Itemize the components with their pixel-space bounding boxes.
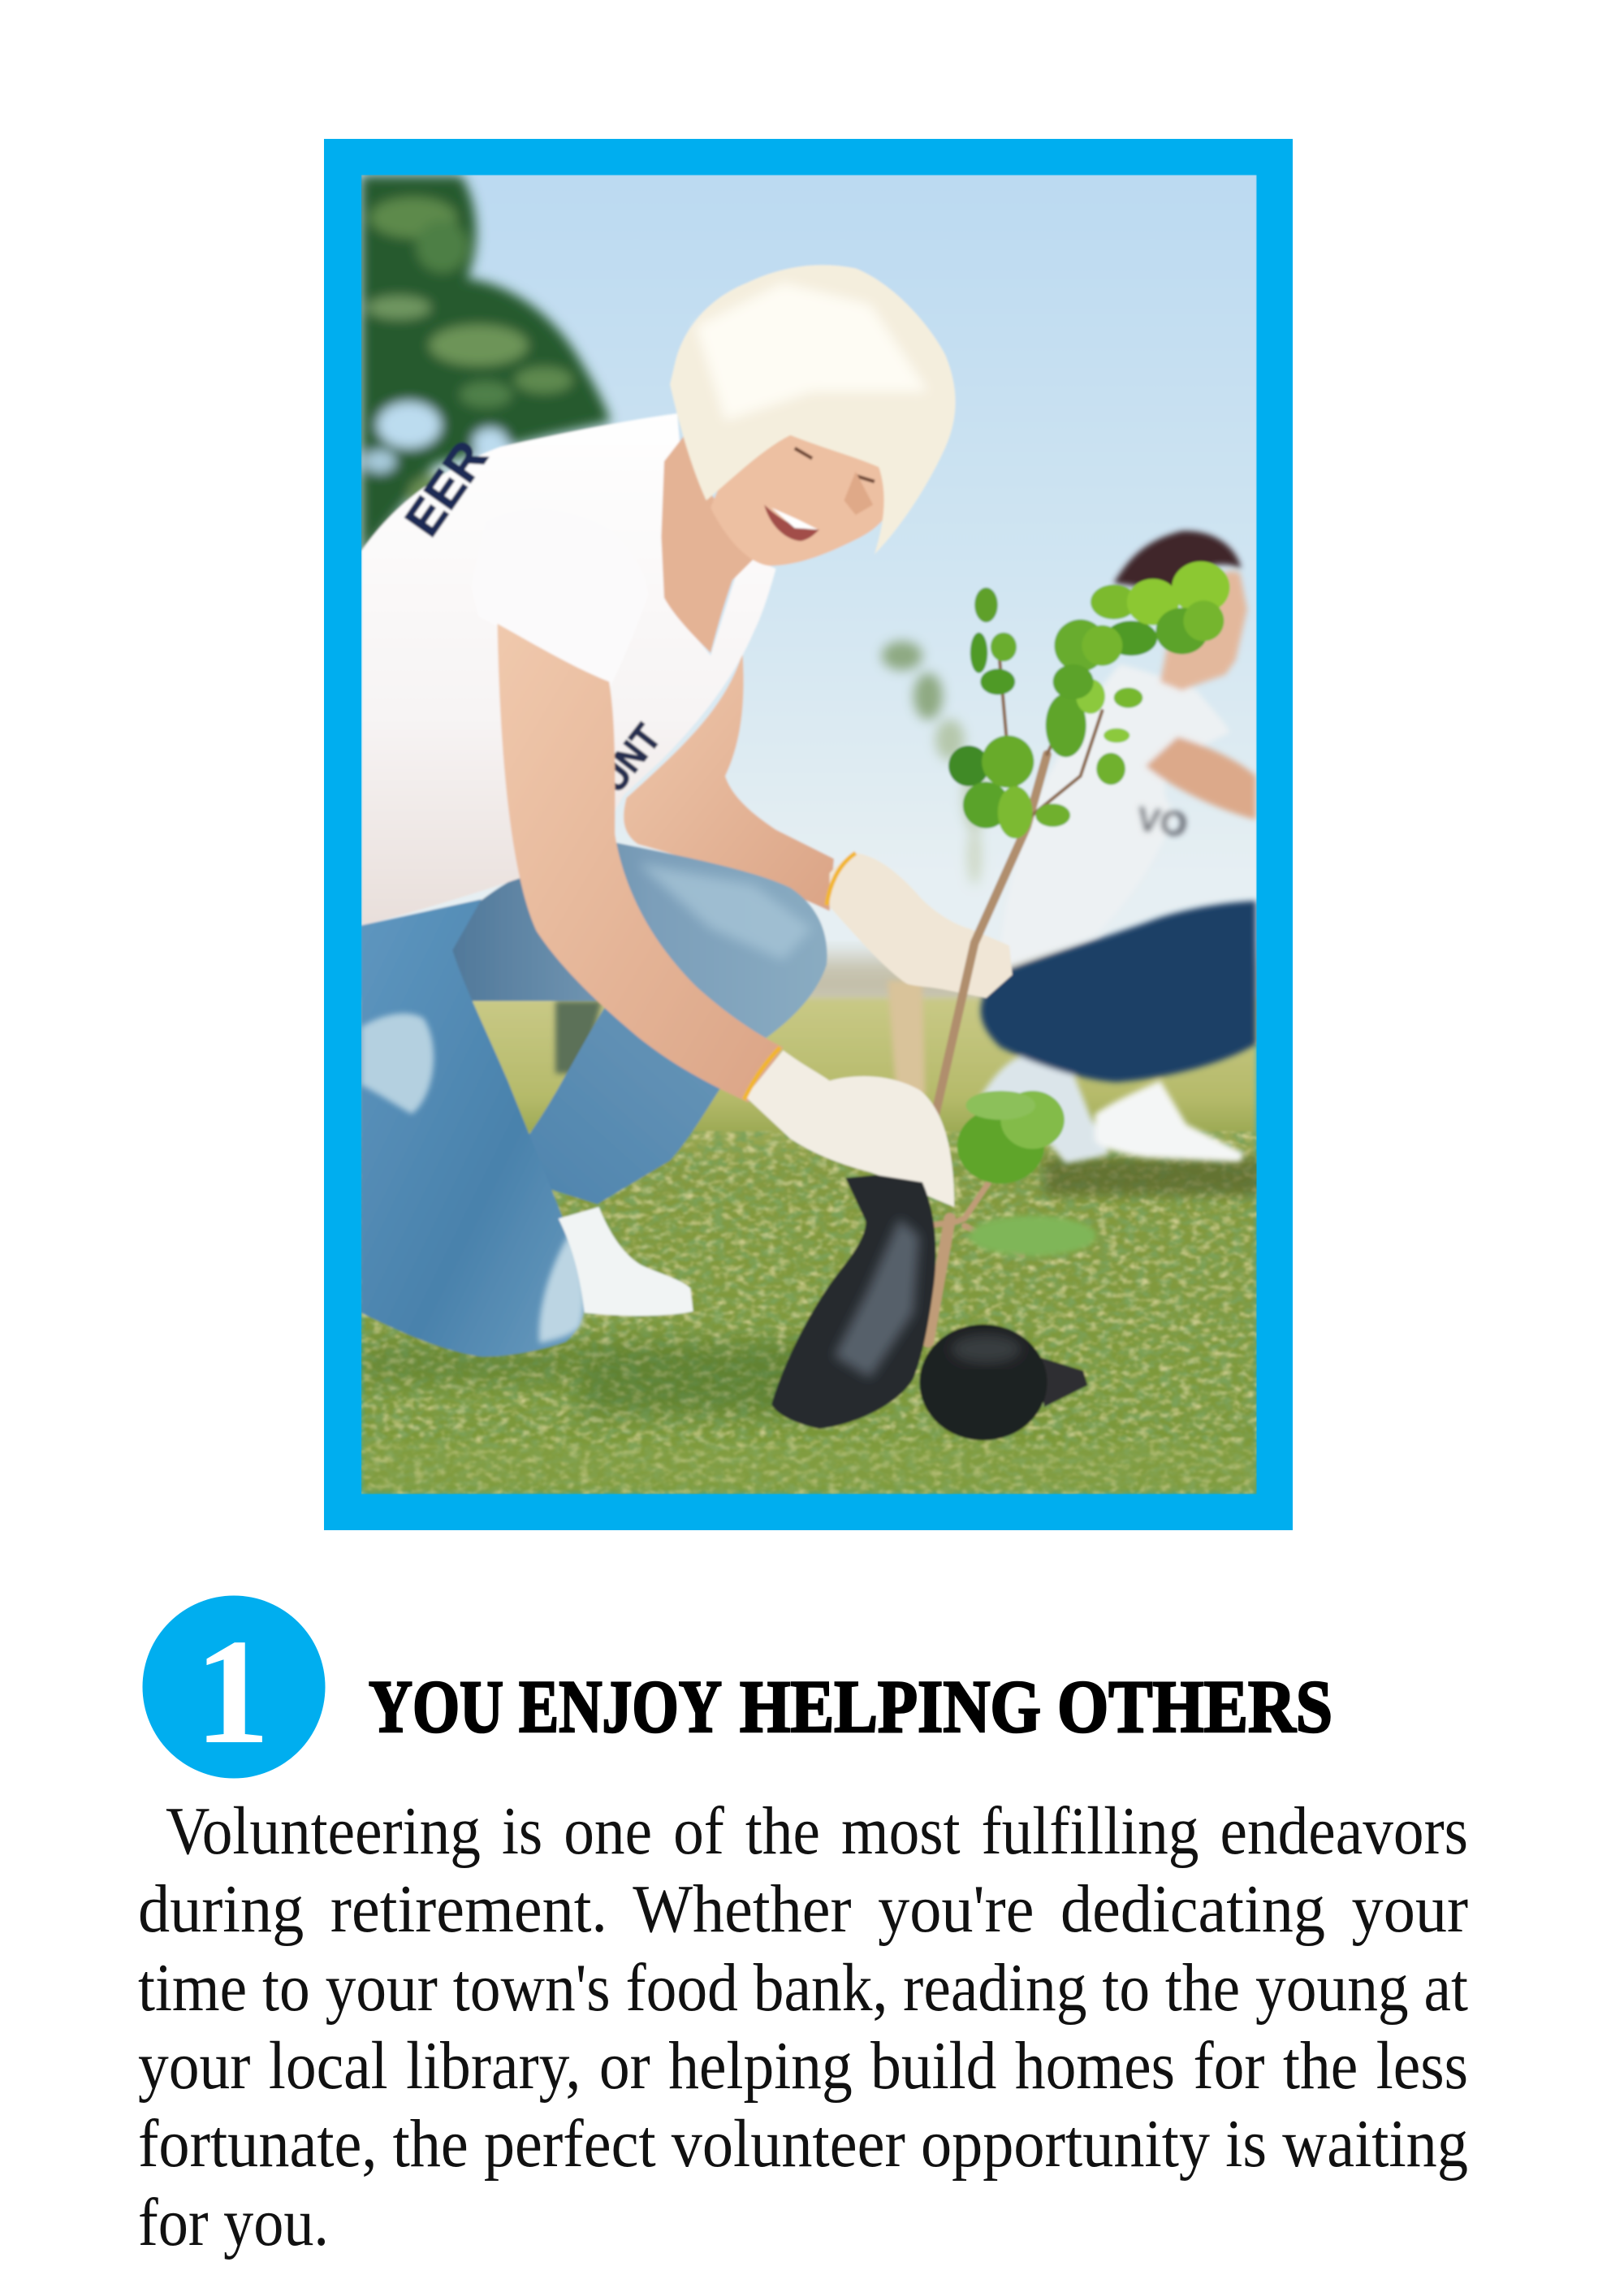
- body paragraph: [138, 1793, 1468, 2260]
- sapling stem: [928, 638, 1102, 1342]
- background tree: [361, 175, 611, 559]
- black root bag: upright: [771, 1175, 936, 1429]
- shirt print: front: UNT: [590, 716, 669, 801]
- second volunteer in background: VO: [1134, 799, 1190, 845]
- second volunteer shirt: [1000, 664, 1230, 969]
- body paragraph: Volunteering is one of the most fulfilling endeavors: [166, 1793, 1468, 1869]
- body paragraph: your local library, or helping build homes for the less: [138, 2028, 1468, 2104]
- body paragraph: during retirement. Whether you're dedicating your: [138, 1871, 1468, 1947]
- step number badge: 1: [195, 1608, 270, 1775]
- sleeve: [471, 509, 648, 689]
- step number badge: [143, 1595, 325, 1779]
- lower glove: [745, 1050, 954, 1207]
- wooden stake: [888, 980, 925, 1095]
- sky: [361, 174, 1257, 1045]
- body paragraph: fortunate, the perfect volunteer opportunity is waiting: [138, 2106, 1468, 2182]
- heading: OTHERS: [1057, 1665, 1332, 1748]
- second volunteer head: [1114, 531, 1247, 690]
- photo frame: blue border: [324, 139, 1293, 1530]
- hair: [670, 265, 956, 554]
- bag sheen: [834, 1218, 919, 1378]
- ground and grass: [361, 998, 1262, 1494]
- photo: volunteer planting a sapling: [361, 174, 1262, 1494]
- background bush strip: [783, 958, 1262, 1010]
- second volunteer sneakers: [978, 1056, 1244, 1163]
- upper glove cuff line: [827, 853, 856, 905]
- black root bag: ball: [919, 1325, 1088, 1440]
- sapling upper leaves: [948, 561, 1230, 838]
- heading: YOU: [369, 1665, 503, 1748]
- second volunteer arm: [1146, 737, 1256, 820]
- facial features: [764, 448, 875, 541]
- jeans highlight on kneecap: [539, 1233, 584, 1343]
- near shirt and torso: [361, 413, 776, 925]
- sapling lower leaves: [957, 1091, 1096, 1256]
- heading: HELPING: [740, 1665, 1041, 1748]
- body paragraph: for you.: [138, 2185, 329, 2260]
- jeans highlight on thigh: [361, 1014, 434, 1114]
- white sneaker: [559, 1207, 693, 1316]
- face: [710, 432, 896, 566]
- heading: ENJOY: [519, 1665, 722, 1748]
- dark post behind legs: [555, 1001, 602, 1074]
- far arm: [624, 653, 834, 911]
- lower glove cuff line: [744, 1047, 780, 1100]
- shin jeans: [515, 1001, 742, 1204]
- distant blurred sapling: [882, 641, 986, 884]
- highlight on knee: [638, 863, 812, 960]
- shirt print: back: EER: [394, 430, 498, 546]
- near arm: [498, 624, 783, 1102]
- body paragraph: time to your town's food bank, reading to the young at: [138, 1950, 1468, 2026]
- second volunteer in background: [978, 531, 1256, 1163]
- neck and chest: [661, 435, 754, 653]
- kneeling-leg jeans: [361, 899, 585, 1356]
- second volunteer jeans: [981, 901, 1256, 1082]
- heading: [369, 1665, 1332, 1748]
- upper glove: [830, 853, 1013, 998]
- hair shading: [696, 283, 928, 421]
- rear thigh jeans: [439, 841, 827, 1056]
